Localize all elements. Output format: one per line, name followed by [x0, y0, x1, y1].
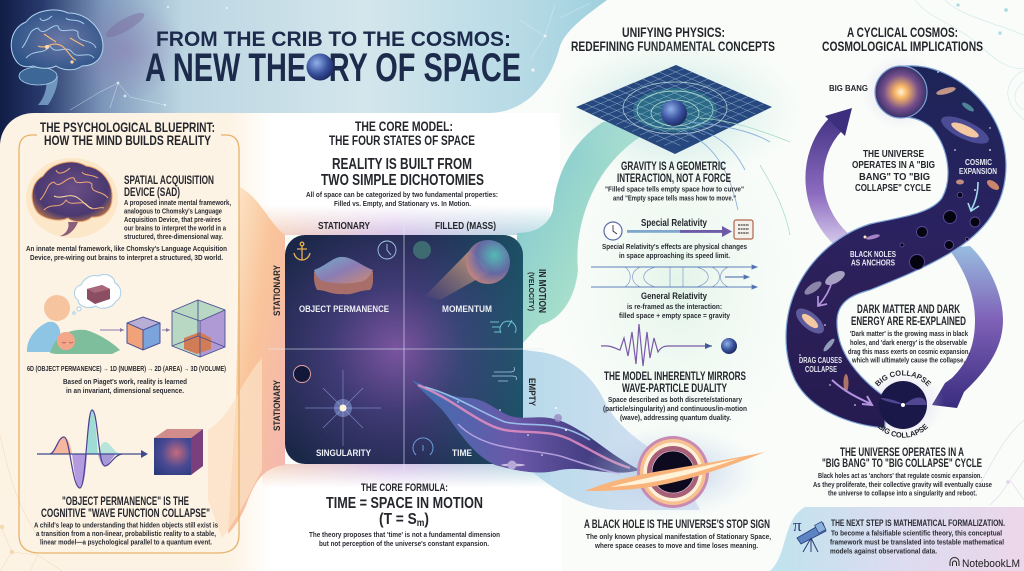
- black hole text: where space ceases to move and time loses meaning.: [594, 541, 758, 550]
- core formula: [309, 482, 500, 548]
- cycle summary text: THE UNIVERSE OPERATES IN A: [840, 445, 964, 459]
- cell: time: TIME: [452, 448, 472, 458]
- cycle summary text: [813, 445, 992, 498]
- duality text: (wave), addressing quantum duality.: [620, 413, 731, 422]
- big collapse arc labels: [874, 370, 932, 438]
- duality text: (particle/singularity) and continuous/in-motion: [603, 404, 747, 413]
- dark matter text: ENERGY ARE RE-EXPLAINED: [851, 314, 966, 328]
- unifying physics heading: [571, 25, 775, 54]
- axis labels: (VELOCITY): [527, 272, 534, 311]
- core formula: The theory proposes that 'time' is not a fundamental dimension: [309, 530, 500, 539]
- object permanence body: A child's leap to understanding that hidden objects still exist is: [34, 520, 218, 530]
- next step text: models against observational data.: [830, 546, 937, 556]
- band labels: DRAG CAUSES: [799, 356, 842, 365]
- gravity text: "Filled space tells empty space how to curve": [605, 184, 744, 194]
- duality text: Space described as both discrete/stationary: [608, 395, 743, 404]
- object permanence body: linear model—a psychological parallel to a quantum event.: [40, 538, 212, 546]
- wave function diagram: [37, 410, 148, 488]
- SAD text block: structured, three-dimensional way.: [124, 232, 223, 241]
- duality text: THE MODEL INHERENTLY MIRRORS: [604, 369, 746, 383]
- general relativity text: General Relativity: [641, 291, 708, 302]
- unifying physics heading: REDEFINING FUNDAMENTAL CONCEPTS: [571, 39, 775, 54]
- general relativity text: filled space + empty space = gravity: [619, 311, 731, 320]
- cell: object permanence: OBJECT PERMANENCE: [299, 304, 389, 314]
- arrow: expansion to collapse: [932, 246, 1003, 408]
- next step text: [830, 518, 1005, 556]
- panel: core model: [268, 119, 547, 548]
- SAD text block: A proposed innate mental framework,: [124, 198, 231, 207]
- band labels: COSMIC: [965, 158, 992, 167]
- innate framework note: [26, 244, 227, 262]
- dark matter text: 'Dark matter' is the growing mass in black: [850, 329, 969, 338]
- card wash: [208, 358, 262, 538]
- icon: speed limit sign: [734, 220, 753, 239]
- object permanence body: [34, 520, 218, 546]
- object permanence body: a transition from a non-linear, probabilistic reality to a stable,: [36, 529, 216, 538]
- gravity text: [605, 159, 744, 202]
- core formula: m: [417, 518, 425, 529]
- icon: header brain: [11, 9, 147, 105]
- dichotomies heading: TWO SIMPLE DICHOTOMIES: [321, 172, 484, 189]
- dark matter text: DARK MATTER AND DARK: [857, 302, 960, 316]
- duality text: [603, 369, 747, 422]
- object permanence heading: [41, 494, 210, 520]
- diagram: length contraction tube: [591, 265, 757, 289]
- panel: psychological blueprint: [19, 120, 239, 553]
- faint network bottom left: [0, 435, 62, 571]
- dimensional sequence label: 6D (OBJECT PERMANENCE) → 1D (NUMBER) → 2D (AREA) → 3D (VOLUME): [27, 364, 226, 373]
- big collapse arc labels: BIG COLLAPSE: [878, 424, 928, 438]
- dichotomies heading: [321, 156, 484, 189]
- arrow: anchors flow: [818, 281, 832, 306]
- panel: unifying physics: [550, 25, 800, 550]
- SAD text block: DEVICE (SAD): [124, 185, 180, 199]
- SAD text block: [124, 173, 231, 241]
- cycle center text: THE UNIVERSE: [863, 148, 924, 160]
- object permanence heading: "OBJECT PERMANENCE" IS THE: [62, 494, 189, 508]
- galaxies: [792, 71, 1001, 406]
- card border: [19, 135, 239, 553]
- core formula: ): [424, 511, 429, 528]
- icon: brain: [26, 158, 118, 238]
- dark matter text: drag this mass exerts on cosmic expansion,: [848, 347, 970, 356]
- cell: momentum: [413, 240, 510, 314]
- arrow: cosmic expansion: [968, 182, 979, 211]
- icon: dial: [413, 438, 433, 455]
- heading: [40, 120, 215, 148]
- cosmos heading: A CYCLICAL COSMOS:: [847, 25, 958, 40]
- arrow: special relativity: [627, 226, 732, 237]
- four states matrix: [268, 218, 545, 475]
- general relativity text: [619, 291, 731, 320]
- peach background wave: [228, 187, 285, 534]
- cycle center text: COLLAPSE" CYCLE: [855, 182, 931, 194]
- arrow: drag: [832, 380, 872, 405]
- arrow: collapse to bang: [814, 108, 852, 248]
- black holes: [900, 192, 980, 270]
- panel: next step: [770, 507, 1024, 571]
- special relativity text: [602, 242, 747, 260]
- object permanence heading: COGNITIVE "WAVE FUNCTION COLLAPSE": [41, 506, 210, 520]
- icon: pi: π: [793, 516, 802, 535]
- band labels: COLLAPSE: [805, 365, 837, 374]
- black hole text: [584, 517, 771, 550]
- axis labels: EMPTY: [526, 378, 537, 407]
- band labels: AS ANCHORS: [851, 258, 896, 268]
- illustration: dimensional cubes: [100, 300, 225, 357]
- green background wave: [517, 122, 640, 349]
- pale blue flow behind ribbon: [500, 349, 700, 510]
- unifying physics heading: UNIFYING PHYSICS:: [622, 25, 725, 40]
- cell: momentum: MOMENTUM: [442, 304, 492, 314]
- column labels: FILLED (MASS): [435, 220, 496, 232]
- axis labels: STATIONARY: [272, 379, 283, 431]
- core model heading: THE CORE MODEL:: [355, 119, 453, 134]
- dichotomies body: Filled vs. Empty, and Stationary vs. In Motion.: [334, 199, 471, 208]
- SAD text block: analogous to Chomsky's Language: [124, 206, 222, 216]
- cosmos heading: [822, 25, 983, 54]
- icon: clock: [378, 241, 396, 259]
- cycle center text: BANG" TO "BIG: [859, 171, 930, 183]
- top tint above matrix: [264, 208, 550, 235]
- icon: big collapse: [879, 381, 927, 429]
- innate framework note: Device, pre-wiring out brains to interpret a structured, 3D world.: [30, 253, 223, 262]
- NotebookLM logo: NotebookLM: [962, 558, 1020, 570]
- icon: anchor: [294, 242, 310, 260]
- column labels: STATIONARY: [318, 220, 370, 232]
- gravity text: INTERACTION, NOT A FORCE: [617, 171, 731, 185]
- general relativity text: is re-framed as the interaction:: [627, 302, 722, 311]
- band labels: [799, 158, 997, 374]
- icon: big bang: [875, 66, 927, 118]
- Piaget note: [63, 377, 187, 395]
- black hole text: The only known physical manifestation of Stationary Space,: [586, 532, 771, 541]
- band labels: EXPANSION: [959, 167, 997, 176]
- title: FROM THE CRIB TO THE COSMOS:: [156, 28, 511, 51]
- Piaget note: Based on Piaget's work, reality is learned: [63, 377, 187, 386]
- chart: curved space grid: [550, 38, 800, 235]
- cell: object permanence: [299, 257, 389, 314]
- title: [145, 28, 521, 90]
- axis labels: STATIONARY: [272, 264, 283, 316]
- faint network right: [970, 420, 1024, 505]
- column labels: [318, 220, 496, 232]
- cell: singularity: [294, 366, 381, 458]
- dichotomies body: [306, 190, 498, 208]
- bottom tint below matrix: [262, 464, 549, 485]
- dark matter text: holes, and 'dark energy' is the observable: [850, 338, 967, 347]
- core model heading: THE FOUR STATES OF SPACE: [329, 133, 475, 148]
- SAD text block: Acquisition Device, that pre-wires: [124, 215, 221, 224]
- dichotomies heading: REALITY IS BUILT FROM: [332, 156, 472, 173]
- dark matter text: [848, 302, 970, 364]
- icon: black hole: [582, 426, 765, 518]
- diagram: wave to particle: [601, 324, 737, 366]
- icon: telescope: [797, 522, 826, 552]
- SAD text block: SPATIAL ACQUISITION: [124, 173, 214, 187]
- SAD text block: our brains to interpret the world in a: [124, 224, 227, 232]
- cycle summary text: the universe to collapse into a singularity and reboot.: [828, 488, 977, 498]
- dichotomies body: All of space can be categorized by two fundamental properties:: [306, 190, 498, 199]
- innate framework note: An innate mental framework, like Chomsky's Language Acquisition: [26, 244, 227, 253]
- illustration: baby and object: [27, 274, 121, 354]
- core formula: (T = S: [379, 511, 423, 528]
- Piaget note: in an invariant, dimensional sequence.: [66, 386, 184, 395]
- core formula: TIME = SPACE IN MOTION: [326, 495, 483, 512]
- cell: singularity: SINGULARITY: [316, 448, 371, 458]
- core formula: THE CORE FORMULA:: [361, 482, 448, 494]
- special relativity label: Special Relativity: [641, 218, 707, 229]
- core formula: but not perception of the universe's constant expansion.: [319, 539, 489, 548]
- icon: wind: [492, 367, 516, 381]
- big collapse arc labels: BIG COLLAPSE: [874, 370, 932, 386]
- icon: speed gauge: [490, 320, 516, 333]
- cycle center text: OPERATES IN A "BIG: [852, 159, 935, 171]
- icon: stable cube: [154, 429, 203, 475]
- gravity text: and "Empty space tells mass how to move.": [613, 194, 736, 202]
- faint contour lines top right: [915, 0, 1024, 120]
- title: A NEW THEORY OF SPACE: [145, 46, 521, 90]
- icon: title sphere: [306, 54, 334, 80]
- gravity text: GRAVITY IS A GEOMETRIC: [621, 159, 726, 173]
- time ribbon: [412, 380, 640, 474]
- heading: THE PSYCHOLOGICAL BLUEPRINT:: [40, 120, 215, 135]
- axis labels: [272, 264, 547, 431]
- band labels: BLACK NOLES: [850, 250, 897, 259]
- cycle center text: [852, 148, 935, 194]
- core model heading: [329, 119, 475, 148]
- dark matter text: which will ultimately cause the collapse.: [851, 356, 965, 364]
- icon: relativity clock: [604, 222, 622, 240]
- icon: small planet: [501, 460, 525, 470]
- decorative header network: [65, 0, 590, 110]
- special relativity text: in space approaching its speed limit.: [619, 251, 730, 260]
- big bang label: BIG BANG: [829, 83, 868, 93]
- special relativity text: Special Relativity's effects are physical changes: [602, 242, 747, 251]
- panel: cyclical cosmos: [785, 25, 1007, 498]
- heading: HOW THE MIND BUILDS REALITY: [44, 133, 211, 148]
- axis labels: IN MOTION: [536, 269, 547, 313]
- duality text: WAVE-PARTICLE DUALITY: [622, 381, 727, 395]
- black hole text: A BLACK HOLE IS THE UNIVERSE'S STOP SIGN: [584, 517, 770, 531]
- cosmic band: [786, 54, 1006, 441]
- header band: [0, 0, 607, 146]
- icon: central mass: [661, 100, 687, 126]
